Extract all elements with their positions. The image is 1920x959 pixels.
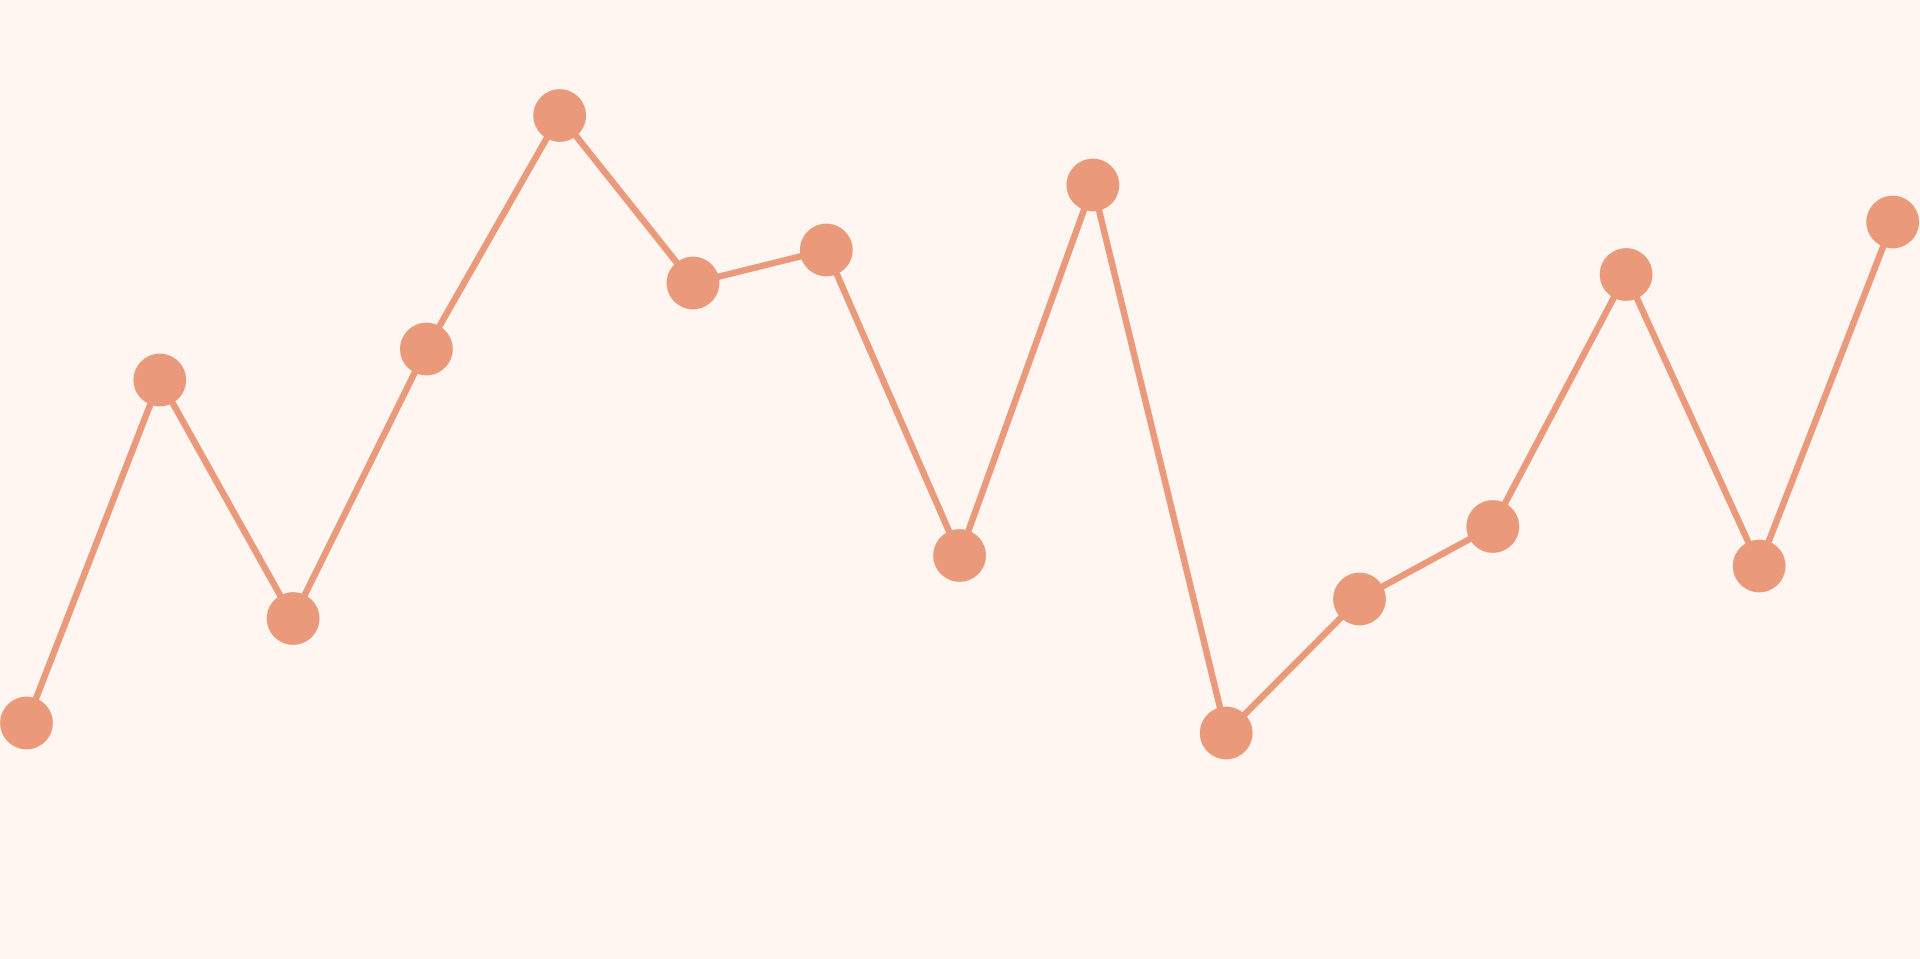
data line [26, 116, 1893, 733]
data points [0, 89, 1919, 759]
